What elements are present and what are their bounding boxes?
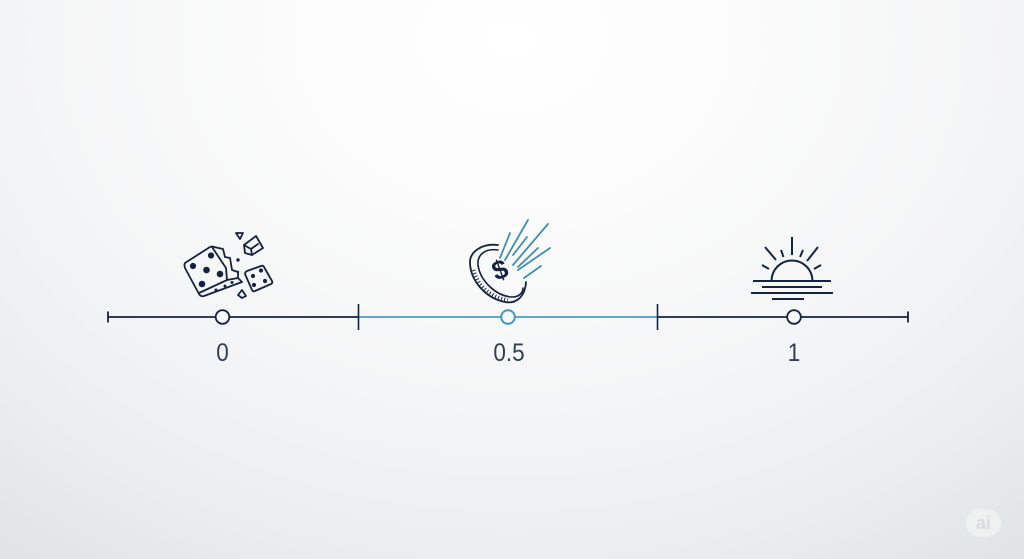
label: 0: 0: [216, 339, 229, 367]
small die: [245, 266, 272, 291]
middle segment: [358, 316, 657, 318]
icon: shattering dice: [184, 233, 272, 298]
left end tick: [107, 312, 109, 322]
horizon lines: [751, 281, 833, 299]
number line: [108, 304, 908, 330]
dollar sign: $: [488, 253, 512, 287]
marker: 0.5: [501, 310, 515, 324]
large die: [184, 246, 242, 296]
badge pill: [966, 509, 1001, 537]
left segment: [108, 316, 358, 318]
motion lines: [500, 220, 550, 278]
sun rays: [762, 237, 821, 269]
badge text: ai: [976, 513, 991, 533]
label: 0.5: 0.5: [493, 339, 525, 367]
tick at second boundary: [656, 304, 658, 330]
tick at first boundary: [358, 304, 360, 330]
right segment: [657, 316, 908, 318]
marker: 1: [787, 310, 801, 324]
icon: falling coin: [470, 220, 550, 302]
shards: [236, 233, 263, 298]
marker: 0: [216, 310, 229, 324]
label: 1: 1: [788, 339, 800, 367]
right end tick: [907, 312, 909, 322]
watermark badge: [966, 509, 1001, 537]
sun dome: [772, 260, 812, 281]
icon: sunrise: [751, 237, 833, 299]
